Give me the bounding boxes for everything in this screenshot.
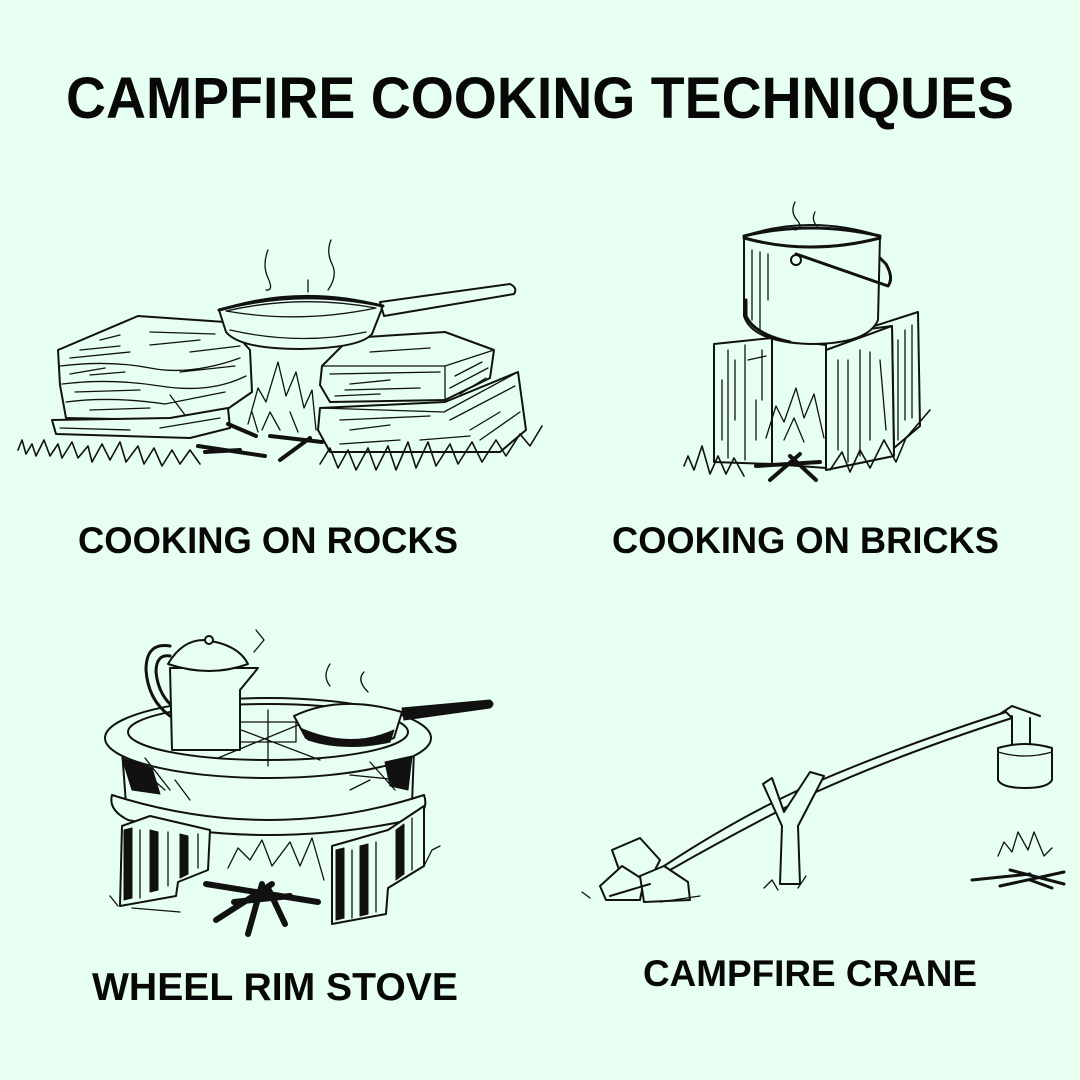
- icon: weight rocks: [600, 838, 690, 902]
- icon: crane pole: [664, 712, 1012, 870]
- icon: frying pan: [219, 284, 515, 349]
- icon: hanging pot: [998, 706, 1052, 788]
- icon: brick logs: [756, 454, 820, 480]
- icon: wheel grass: [110, 846, 440, 912]
- icon: skillet: [294, 700, 493, 747]
- icon: left bricks: [120, 816, 210, 906]
- label: wheel rim stove: WHEEL RIM STOVE: [92, 966, 458, 1009]
- icon: coffee pot: [146, 636, 258, 750]
- icon: brick fire: [766, 388, 824, 442]
- icon: steam: [265, 240, 334, 292]
- illustration: wheel rim stove: [105, 630, 493, 934]
- illustration: cooking on rocks: [18, 240, 542, 470]
- icon: forked support: [763, 772, 824, 884]
- illustration: cooking on bricks: [684, 202, 930, 480]
- icon: crane grass: [582, 876, 806, 902]
- label: cooking on rocks: COOKING ON ROCKS: [78, 520, 458, 561]
- icon: logs: [198, 424, 322, 460]
- icon: wheel logs: [206, 884, 318, 934]
- label: cooking on bricks: COOKING ON BRICKS: [612, 520, 999, 561]
- icon: crane fire and logs: [972, 832, 1064, 888]
- icon: pot with bail handle: [744, 225, 891, 344]
- icon: brick grass: [684, 410, 930, 476]
- label: campfire crane: CAMPFIRE CRANE: [643, 953, 977, 994]
- illustration: campfire crane: [582, 706, 1064, 902]
- icon: brick stack: [714, 312, 920, 470]
- icon: left stacked rocks: [52, 316, 252, 438]
- icon: right bricks: [332, 806, 424, 924]
- icon: grass: [18, 426, 542, 470]
- icon: brick steam: [793, 202, 817, 230]
- title: CAMPFIRE COOKING TECHNIQUES: [66, 66, 1014, 131]
- icon: right stacked rocks: [318, 332, 526, 452]
- icon: wheel steam: [254, 630, 368, 692]
- icon: wheel fire: [228, 838, 324, 880]
- icon: fire: [248, 362, 316, 432]
- icon: wheel rim: [105, 698, 431, 835]
